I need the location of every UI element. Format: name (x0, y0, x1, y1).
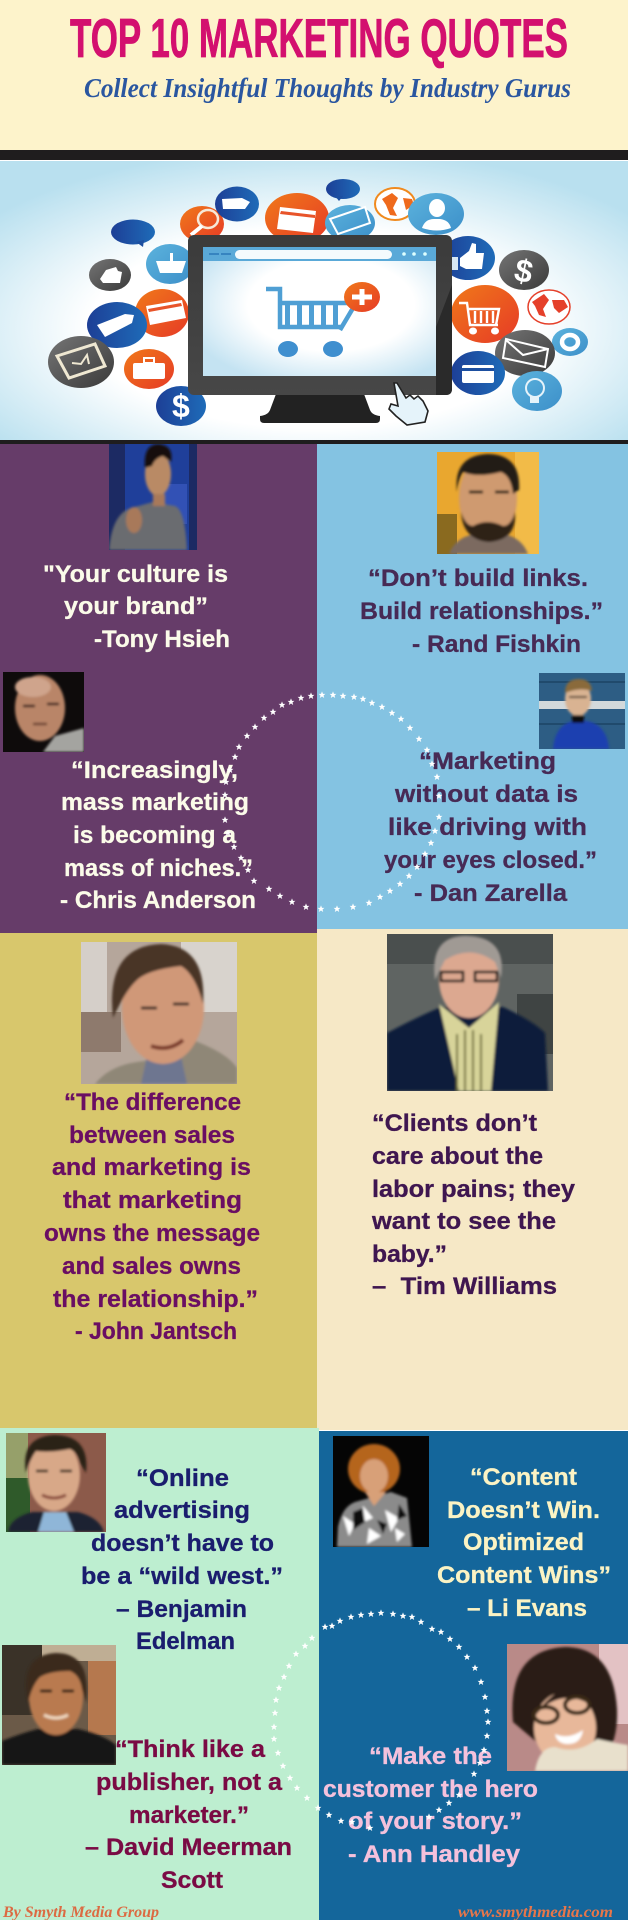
photo: Benjamin Edelman (6, 1433, 106, 1532)
quote: Tim Williams: care about the (372, 1143, 543, 1170)
icon: dollar blue: $ (172, 388, 190, 424)
photo: Dan Zarella (539, 673, 625, 749)
panel: John Jantsch (0, 933, 317, 1428)
quote: Tim Williams: want to see the (371, 1208, 556, 1235)
icon: chart gray (48, 336, 114, 388)
quote: Tony Hsieh: your brand” (64, 593, 208, 620)
icon: globe orange (375, 188, 415, 220)
icon: tag blue left (87, 302, 147, 348)
quote: David Meerman Scott: Scott (161, 1867, 223, 1894)
quote: Tim Williams: baby.” (372, 1241, 447, 1268)
icon: gear (552, 328, 588, 356)
panel: Tim Williams (317, 929, 628, 1430)
quote: Chris Anderson: “Increasingly, (71, 757, 238, 784)
quote: Tony Hsieh: "Your culture is (43, 561, 228, 588)
quote: Tony Hsieh (43, 561, 230, 653)
quote: John Jantsch: the relationship.” (53, 1286, 258, 1313)
icon: magnifier (180, 206, 224, 242)
monitor (188, 235, 452, 395)
quote: Rand Fishkin (360, 565, 603, 658)
quote: David Meerman Scott: publisher, not a (96, 1769, 283, 1796)
icon: hand cursor (389, 383, 428, 425)
panel: Benjamin Edelman and David Meerman Scott (0, 1428, 319, 1920)
quote: Chris Anderson: - Chris Anderson (60, 887, 256, 914)
quote: John Jantsch: that marketing (63, 1187, 242, 1214)
quote: Dan Zarella: - Dan Zarella (414, 880, 568, 907)
icon: thumbs up gray (89, 259, 131, 291)
quote: David Meerman Scott (85, 1736, 292, 1894)
icon: dollar dark: $ (511, 252, 536, 290)
icon: cart orange (451, 285, 519, 343)
icon: shopping cart (266, 282, 380, 357)
quote: Benjamin Edelman (81, 1465, 283, 1655)
quote: John Jantsch (44, 1089, 260, 1345)
icon: dollar dark (499, 250, 549, 290)
photo: Rand Fishkin (437, 452, 539, 554)
quote: John Jantsch: owns the message (44, 1220, 260, 1247)
quote: Chris Anderson (60, 757, 256, 914)
quote: Benjamin Edelman: “Online (136, 1465, 229, 1492)
quote: Benjamin Edelman: Edelman (136, 1628, 235, 1655)
quote: Ann Handley: of your story.” (348, 1808, 522, 1835)
star ring: upper quotes (222, 691, 442, 912)
quote: Tim Williams: – Tim Williams (372, 1273, 557, 1300)
quote: Li Evans: Content Wins” (437, 1562, 611, 1589)
quote: Chris Anderson: mass of niches.” (64, 855, 253, 882)
monitor stand (260, 394, 380, 423)
photo: Li Evans (333, 1436, 429, 1547)
quote: Tim Williams: labor pains; they (372, 1176, 576, 1203)
photo: Tim Williams (387, 934, 553, 1091)
quote: Li Evans: Optimized (463, 1529, 584, 1556)
quote: Li Evans: Doesn’t Win. (447, 1497, 600, 1524)
panel: Rand Fishkin (317, 444, 628, 929)
header band (0, 0, 628, 150)
icon: globe red (528, 290, 570, 324)
quote: David Meerman Scott: marketer.” (129, 1802, 249, 1829)
icon: briefcase (124, 349, 174, 389)
quote: Rand Fishkin: - Rand Fishkin (412, 631, 581, 658)
quote: David Meerman Scott: “Think like a (115, 1736, 266, 1763)
icon: card orange top (265, 193, 329, 243)
quote: Ann Handley: “Make the (369, 1743, 492, 1770)
icon: mail gray (495, 330, 555, 376)
quote: Li Evans (437, 1464, 611, 1622)
quote: Tony Hsieh: -Tony Hsieh (94, 626, 230, 653)
quote: Ann Handley: - Ann Handley (348, 1841, 521, 1868)
quote: John Jantsch: and sales owns (62, 1253, 241, 1280)
quote: Li Evans: “Content (470, 1464, 577, 1491)
icon: person (408, 193, 464, 235)
quote: Benjamin Edelman: advertising (114, 1497, 250, 1524)
hero illustration: monitor with marketing icons (0, 161, 628, 440)
quote: Tim Williams: “Clients don’t (372, 1110, 537, 1137)
quote: Benjamin Edelman: doesn’t have to (91, 1530, 274, 1557)
icon: light bulb (512, 371, 562, 411)
quote: John Jantsch: between sales (69, 1122, 235, 1149)
quote: John Jantsch: “The difference (64, 1089, 241, 1116)
photo: Chris Anderson (3, 672, 84, 752)
icon: card blue (451, 351, 505, 395)
quote: Tim Williams (371, 1110, 576, 1300)
quote: Chris Anderson: is becoming a (73, 822, 237, 849)
quote: Ann Handley: customer the hero (323, 1776, 538, 1803)
panel: Tony Hsieh (0, 444, 317, 933)
quote: Li Evans: – Li Evans (467, 1595, 587, 1622)
subtitle: Collect Insightful Thoughts by Industry Gurus (84, 73, 571, 103)
quote: Chris Anderson: mass marketing (61, 789, 249, 816)
icon: speech bubbles (111, 179, 360, 247)
star ring: lower quotes (271, 1609, 491, 1831)
quote: Benjamin Edelman: be a “wild west.” (81, 1563, 283, 1590)
quote: Rand Fishkin: “Don’t build links. (368, 565, 588, 592)
quote: Dan Zarella: without data is (394, 781, 578, 808)
quote: John Jantsch: and marketing is (52, 1154, 251, 1181)
quote: Rand Fishkin: Build relationships.” (360, 598, 603, 625)
icon: basket (146, 244, 194, 284)
photo: David Meerman Scott (2, 1645, 116, 1765)
photo: Tony Hsieh (109, 444, 197, 550)
icon: dollar blue (156, 386, 206, 426)
icon: mail (325, 205, 375, 241)
icon: thumbs up blue (441, 236, 495, 280)
quote: Ann Handley (323, 1743, 538, 1868)
quote: Dan Zarella: like driving with (388, 814, 587, 841)
quote: Dan Zarella: your eyes closed.” (384, 847, 597, 874)
panel: Li Evans and Ann Handley (319, 1431, 628, 1920)
quote: John Jantsch: - John Jantsch (75, 1318, 237, 1345)
icon: tag top (215, 186, 259, 222)
photo: Ann Handley (507, 1644, 628, 1771)
photo: John Jantsch (81, 942, 237, 1084)
icon: card orange left (135, 289, 189, 337)
quote: Dan Zarella: “Marketing (419, 748, 556, 775)
quote: Benjamin Edelman: – Benjamin (116, 1596, 247, 1623)
quote: David Meerman Scott: – David Meerman (85, 1834, 292, 1861)
quote: Dan Zarella (384, 748, 597, 907)
